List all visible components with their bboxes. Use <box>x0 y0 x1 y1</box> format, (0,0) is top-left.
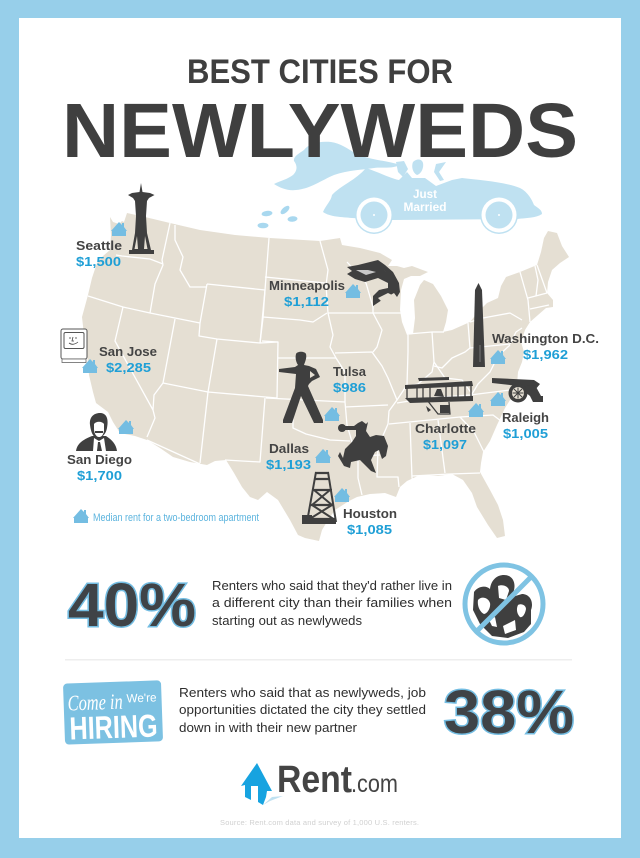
label: Tulsa: $986 <box>333 380 366 395</box>
icon: golden driller statue <box>279 352 323 423</box>
icon: washington monument <box>473 283 485 367</box>
label: San Jose <box>99 344 157 375</box>
badge: come in we're hiring: HIRING <box>69 707 158 746</box>
title: BEST CITIES FOR <box>187 53 453 91</box>
text: just married: Married <box>404 200 446 214</box>
label: Raleigh <box>502 410 549 441</box>
label: Minneapolis <box>269 278 345 309</box>
badge: come in we're hiring <box>63 680 163 747</box>
label: San Diego: San Diego <box>67 452 132 467</box>
label: Washington D.C.: Washington D.C. <box>492 331 599 346</box>
text: job statement: down in with their new partner <box>179 720 358 735</box>
icon: San Diego anchorman portrait <box>76 413 117 451</box>
logo: Rent.com <box>241 759 398 805</box>
text: family statement: a different city than their families when <box>212 595 452 610</box>
label: Seattle <box>76 238 122 269</box>
text: job statement <box>179 685 426 735</box>
divider <box>65 659 572 660</box>
text: just married <box>404 187 446 214</box>
logo: Rent.com: .com <box>351 770 398 798</box>
text: family statement <box>212 578 452 628</box>
icon: cannon <box>492 378 543 402</box>
legend: median rent <box>73 509 259 524</box>
icon: walleye fish <box>347 260 400 306</box>
label: Minneapolis: Minneapolis <box>269 278 345 293</box>
icon: oil derrick <box>302 472 336 524</box>
illustration: just married car <box>258 142 542 234</box>
label: Charlotte: Charlotte <box>415 421 476 436</box>
label: San Jose: San Jose <box>99 344 157 359</box>
stat: 40 percent: 40% <box>68 571 196 639</box>
icon: wright flyer biplane <box>405 377 473 414</box>
label: Houston: $1,085 <box>347 522 392 537</box>
logo: Rent.com: Rent <box>277 759 352 801</box>
stat: 38 percent: 38% <box>444 678 574 746</box>
icon: rent houses on map <box>82 222 506 502</box>
text: family statement: starting out as newlyweds <box>212 613 362 628</box>
label: Dallas: Dallas <box>269 441 309 456</box>
title <box>62 53 578 174</box>
label: Tulsa: Tulsa <box>333 364 367 379</box>
badge: come in we're hiring: We're <box>126 690 157 705</box>
label: Minneapolis: $1,112 <box>284 294 329 309</box>
label: San Diego: $1,700 <box>77 468 122 483</box>
icon: bucking bronco and rider <box>338 421 388 473</box>
label: Raleigh: Raleigh <box>502 410 549 425</box>
label: Washington D.C.: $1,962 <box>523 347 568 362</box>
icon: space needle <box>128 183 154 254</box>
label: San Diego <box>67 452 132 483</box>
label: Dallas <box>266 441 311 472</box>
text: family statement: Renters who said that they'd rather live in <box>212 578 452 593</box>
label: San Jose: $2,285 <box>106 360 151 375</box>
label: Seattle: Seattle <box>76 238 122 253</box>
label: Raleigh: $1,005 <box>503 426 548 441</box>
label: Houston <box>343 506 397 537</box>
label: Charlotte: $1,097 <box>423 437 467 452</box>
legend: median rent: Median rent for a two-bedroom apartment <box>93 512 259 524</box>
text: job statement: opportunities dictated the city they settled <box>179 702 426 717</box>
text: job statement: Renters who said that as newlyweds, job <box>179 685 426 700</box>
label: Seattle: $1,500 <box>76 254 121 269</box>
source note: Source: Rent.com data and survey of 1,000 U.S. renters. <box>220 818 419 827</box>
map: United States <box>82 213 569 541</box>
label: Tulsa <box>333 364 367 395</box>
label: Dallas: $1,193 <box>266 457 311 472</box>
label: Houston: Houston <box>343 506 397 521</box>
badge: come in we're hiring: Come in <box>67 689 123 716</box>
label: Washington D.C. <box>492 331 599 362</box>
icon: no family sign <box>465 565 543 643</box>
icon: retro computer <box>61 329 87 362</box>
title: NEWLYWEDS <box>62 88 578 174</box>
label: Charlotte <box>415 421 476 452</box>
text: just married: Just <box>413 187 437 201</box>
